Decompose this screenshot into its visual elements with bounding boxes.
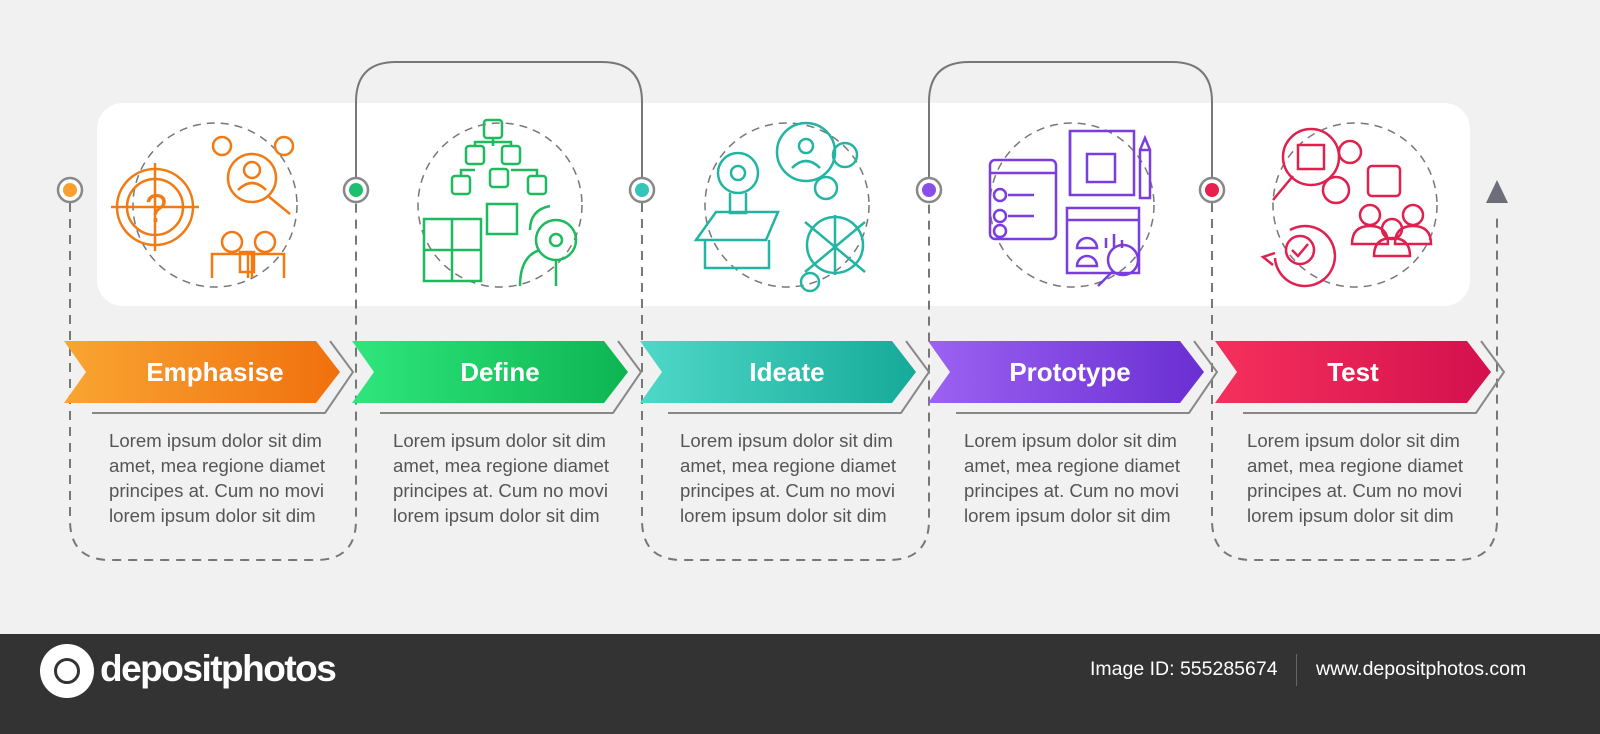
body texts: Lorem ipsum dolor sit dim: [1247, 430, 1460, 451]
body texts: lorem ipsum dolor sit dim: [680, 505, 887, 526]
body texts: principes at. Cum no movi: [680, 480, 895, 501]
icon: test: [1263, 129, 1431, 286]
body texts: principes at. Cum no movi: [109, 480, 324, 501]
body texts: lorem ipsum dolor sit dim: [964, 505, 1171, 526]
body texts: [109, 430, 1464, 526]
connector line: [70, 62, 1497, 560]
body texts: Lorem ipsum dolor sit dim: [680, 430, 893, 451]
body texts: lorem ipsum dolor sit dim: [109, 505, 316, 526]
dots: [58, 178, 1224, 202]
dashed icon circles: [133, 123, 1437, 287]
body texts: principes at. Cum no movi: [1247, 480, 1462, 501]
chevrons: [64, 341, 1504, 413]
arrow head: [1486, 180, 1508, 203]
image id: Image ID: 555285674: [1090, 658, 1278, 680]
body texts: principes at. Cum no movi: [393, 480, 608, 501]
icon: emphasise: ?: [145, 187, 167, 231]
url: www.depositphotos.com: [1316, 658, 1526, 680]
icon panel background: [97, 103, 1470, 306]
body texts: amet, mea regione diamet: [393, 455, 610, 476]
chevrons: Emphasise: [146, 357, 284, 387]
body texts: amet, mea regione diamet: [1247, 455, 1464, 476]
body texts: lorem ipsum dolor sit dim: [393, 505, 600, 526]
body texts: amet, mea regione diamet: [964, 455, 1181, 476]
body texts: Lorem ipsum dolor sit dim: [964, 430, 1177, 451]
footer: [0, 634, 1600, 734]
chevrons: Test: [1327, 357, 1379, 387]
body texts: amet, mea regione diamet: [109, 455, 326, 476]
body texts: Lorem ipsum dolor sit dim: [393, 430, 606, 451]
chevrons: Ideate: [749, 357, 825, 387]
chevrons: Prototype: [1009, 357, 1131, 387]
body texts: amet, mea regione diamet: [680, 455, 897, 476]
body texts: lorem ipsum dolor sit dim: [1247, 505, 1454, 526]
icon: define: [424, 120, 576, 286]
icon: ideate: [696, 123, 865, 291]
body texts: Lorem ipsum dolor sit dim: [109, 430, 322, 451]
icon: emphasise: [111, 137, 293, 278]
chevrons: Define: [460, 357, 540, 387]
body texts: principes at. Cum no movi: [964, 480, 1179, 501]
logo: depositphotos: [100, 648, 335, 689]
logo: [40, 644, 336, 698]
icon: prototype: [990, 131, 1150, 286]
icon: camera logo: [40, 644, 94, 698]
